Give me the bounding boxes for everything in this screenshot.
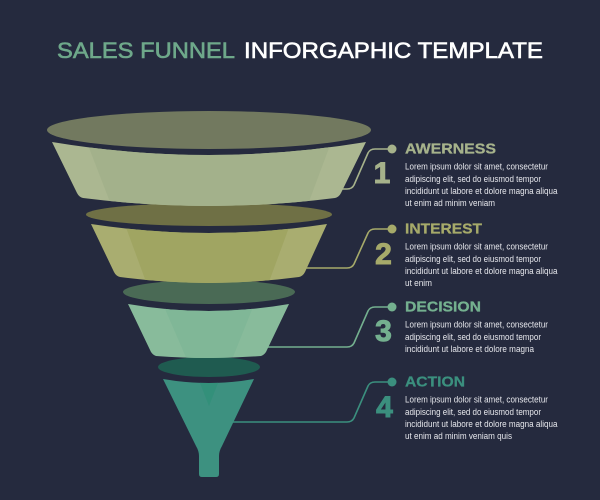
funnel opening ellipse 3 — [123, 280, 295, 304]
funnel opening ellipse 2 — [86, 203, 332, 226]
connector line 3 — [268, 302, 396, 347]
funnel opening ellipse 4 — [158, 357, 260, 377]
title — [57, 38, 543, 63]
text block 1: adipiscing elit, sed do eiusmod tempor — [405, 174, 541, 184]
text block 3 — [405, 320, 548, 354]
connector line 2 — [304, 224, 396, 268]
number 3: 3 — [375, 315, 392, 348]
text block 4: incididunt ut labore et dolore magna aliqua — [405, 419, 558, 429]
text block 3: adipiscing elit, sed do eiusmod tempor — [405, 332, 541, 342]
text block 1: Lorem ipsum dolor sit amet, consectetur — [405, 162, 548, 172]
funnel band 2 — [91, 224, 327, 283]
text block 4: Lorem ipsum dolor sit amet, consectetur — [405, 394, 548, 404]
text block 4: adipiscing elit, sed do eiusmod tempor — [405, 407, 541, 417]
section 2: interest — [375, 220, 558, 288]
heading action: ACTION — [405, 374, 465, 390]
connector line 4 — [232, 378, 396, 422]
text block 1 — [405, 162, 558, 208]
text block 2: ut enim — [405, 278, 432, 288]
text block 1: ut enim ad minim veniam — [405, 198, 495, 208]
funnel band 4 spout — [163, 379, 254, 477]
section 1: awerness — [374, 140, 558, 208]
text block 2: Lorem ipsum dolor sit amet, consectetur — [405, 242, 548, 252]
heading awerness: AWERNESS — [405, 140, 496, 158]
text block 2: adipiscing elit, sed do eiusmod tempor — [405, 254, 541, 264]
text block 3: Lorem ipsum dolor sit amet, consectetur — [405, 320, 548, 330]
text block 4: ut enim ad minim veniam quis — [405, 431, 512, 441]
number 1: 1 — [374, 157, 390, 190]
text block 2: incididunt ut labore et dolore magna aliqua — [405, 266, 558, 276]
text block 3: incididunt ut labore et dolore magna — [405, 344, 534, 354]
text block 4 — [405, 394, 558, 441]
connector line 1 — [342, 144, 396, 189]
funnel — [40, 111, 380, 480]
funnel band 3 — [128, 304, 289, 358]
heading decision: DECISION — [405, 298, 481, 316]
heading interest: INTEREST — [405, 220, 482, 238]
text block 2 — [405, 242, 558, 288]
section 4: action — [376, 374, 558, 441]
section 3: decision — [375, 298, 548, 354]
number 4: 4 — [376, 391, 393, 424]
text block 1: incididunt ut labore et dolore magna aliqua — [405, 186, 558, 196]
funnel opening ellipse 1 — [47, 111, 371, 149]
title: INFORGAPHIC TEMPLATE — [244, 38, 543, 63]
title: SALES FUNNEL — [57, 38, 235, 63]
number 2: 2 — [375, 238, 392, 271]
funnel band 1 — [52, 142, 366, 206]
